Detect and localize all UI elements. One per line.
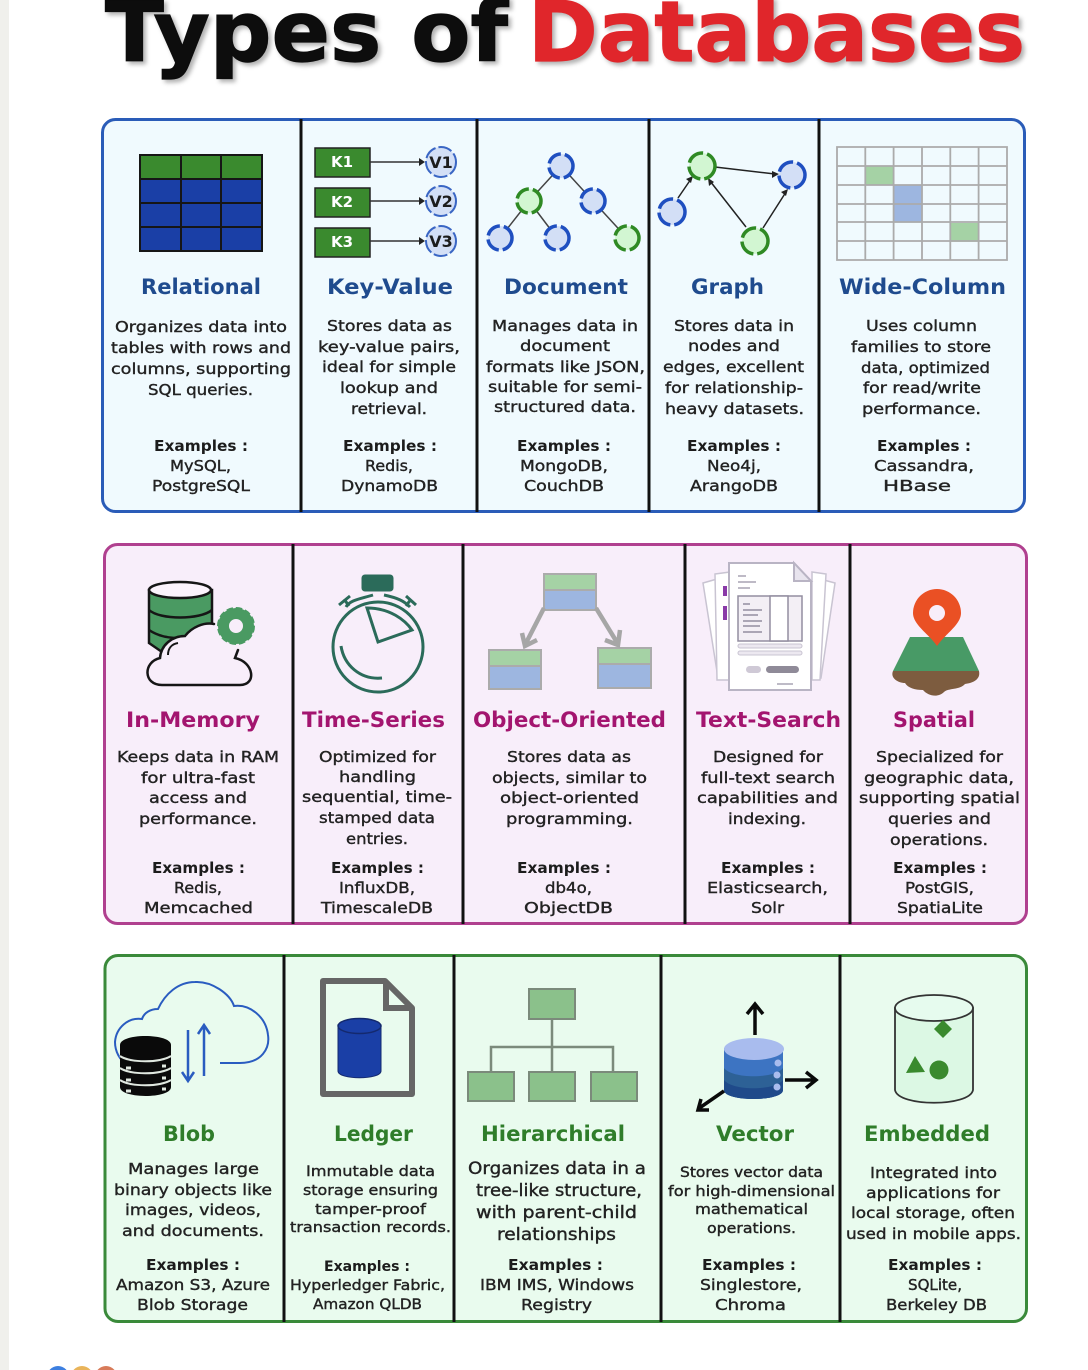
examples: spatial [893,859,987,917]
column: hierarchical [468,989,646,1314]
description: wide-column: data, optimized [861,359,990,377]
description: spatial: geographic data, [864,769,1014,787]
description: spatial: supporting spatial [859,789,1020,807]
icon: graph [659,153,805,254]
column: key-value [315,147,460,495]
description: object-oriented: object-oriented [500,789,639,807]
description: text-search: full-text search [701,769,835,787]
column: graph [659,153,805,495]
description: time-series: entries. [346,830,408,848]
description: document: suitable for semi- [488,378,642,396]
examples: spatial: SpatiaLite [897,899,983,917]
description: in-memory: for ultra-fast [141,769,255,787]
examples: blob: Blob Storage [137,1296,248,1314]
examples: document: CouchDB [524,477,604,495]
heading: object-oriented: Object-Oriented [473,708,666,732]
examples: spatial: Examples : [893,859,987,877]
description: key-value: lookup and [340,379,438,397]
description: graph: nodes and [688,337,780,355]
heading: hierarchical: Hierarchical [481,1122,625,1146]
description: hierarchical: tree-like structure, [476,1181,642,1200]
description: relational: Organizes data into [115,318,287,336]
examples: wide-column [874,437,974,495]
examples: embedded: Berkeley DB [886,1296,987,1314]
description: vector [668,1165,835,1237]
heading: vector: Vector [716,1122,795,1146]
examples: key-value: DynamoDB [341,477,438,495]
description: text-search [697,748,838,828]
heading: embedded: Embedded [864,1122,990,1146]
column: spatial [859,589,1020,917]
examples: wide-column: Cassandra, [874,457,974,475]
description: in-memory [117,748,279,828]
description: spatial: operations. [890,831,988,849]
description: vector: for high-dimensional [668,1184,835,1200]
examples: relational: Examples : [154,437,248,455]
description: graph [663,317,804,418]
examples: object-oriented [517,859,613,917]
description: key-value: retrieval. [351,400,427,418]
examples: blob: Examples : [146,1256,240,1274]
heading: in-memory: In-Memory [126,708,260,732]
description: blob: images, videos, [125,1201,261,1219]
examples: object-oriented: db4o, [545,879,592,897]
column: wide-column [837,147,1007,495]
description: key-value [318,317,460,418]
description: graph: for relationship- [665,379,803,397]
description: embedded: used in mobile apps. [846,1225,1021,1243]
examples: hierarchical: Examples : [508,1256,603,1274]
examples: text-search [707,859,828,917]
heading: key-value: Key-Value [327,275,453,299]
examples: embedded [886,1256,987,1314]
examples: text-search: Examples : [721,859,815,877]
panel: row three [105,955,1026,1322]
column: vector [668,1004,835,1314]
examples: graph [687,437,781,495]
examples: object-oriented: ObjectDB [524,899,613,917]
description: blob: binary objects like [114,1181,272,1199]
icon: blob cloud storage [115,982,268,1096]
icon: vector database [698,1004,816,1110]
description: vector: Stores vector data [680,1165,823,1181]
description: key-value: ideal for simple [322,358,456,376]
description: spatial [859,748,1020,849]
column: blob [114,982,272,1314]
examples: key-value: Examples : [343,437,437,455]
examples: key-value [341,437,438,495]
description: object-oriented: programming. [506,810,633,828]
description: wide-column [851,317,991,418]
description: relational [111,318,291,399]
description: hierarchical [468,1159,646,1244]
heading: graph: Graph [691,275,764,299]
examples: hierarchical: Registry [521,1296,592,1314]
examples: object-oriented: Examples : [517,859,611,877]
description: document: formats like JSON, [486,358,645,376]
icon: key value pairs: K3 [331,233,353,251]
description: key-value: key-value pairs, [318,338,460,356]
panel: row two [104,544,1026,924]
examples: relational [152,437,250,495]
heading: relational: Relational [141,275,261,299]
examples: time-series: TimescaleDB [320,899,433,917]
icon: key value pairs: V1 [429,153,453,172]
description: ledger: storage ensuring [303,1183,438,1199]
title [105,0,1025,81]
examples: blob: Amazon S3, Azure [116,1276,270,1294]
examples: vector: Chroma [715,1296,786,1314]
description: key-value: Stores data as [327,317,452,335]
examples: vector: Singlestore, [700,1276,802,1294]
description: document [486,317,645,416]
description: time-series: stamped data [319,809,435,827]
heading: time-series: Time-Series [302,708,445,732]
description: text-search: capabilities and [697,789,838,807]
icon: document stack [703,563,835,690]
description: graph: heavy datasets. [665,400,804,418]
examples: text-search: Solr [751,899,785,917]
icon: table [140,155,262,251]
column: document [486,154,645,495]
icon: key value pairs: K2 [331,193,353,211]
description: graph: edges, excellent [663,358,804,376]
examples: ledger [290,1259,445,1313]
column: in-memory [117,582,279,917]
column: ledger [290,981,451,1313]
description: blob [114,1160,272,1240]
description: spatial: Specialized for [876,748,1004,766]
icon: embedded cylinder [895,995,973,1103]
icon: key value pairs: V2 [429,192,453,211]
examples: document: MongoDB, [520,457,608,475]
examples: in-memory: Redis, [174,879,222,897]
description: in-memory: access and [149,789,247,807]
column: text-search [696,563,841,917]
description: blob: and documents. [122,1222,264,1240]
description: graph: Stores data in [674,317,794,335]
examples: graph: ArangoDB [690,477,778,495]
heading: ledger: Ledger [334,1122,414,1146]
examples: vector [700,1256,802,1314]
icon: map pin on land [892,589,979,696]
description: spatial: queries and [888,810,991,828]
description: embedded: Integrated into [870,1164,997,1182]
examples: document: Examples : [517,437,611,455]
description: relational: SQL queries. [148,381,253,399]
description: document: structured data. [494,398,636,416]
description: wide-column: for read/write [863,379,981,397]
examples: time-series [320,859,433,917]
description: time-series [302,748,452,848]
description: ledger: tamper-proof [315,1202,427,1218]
heading: wide-column: Wide-Column [839,275,1006,299]
description: document: document [520,337,610,355]
description: wide-column: families to store [851,338,991,356]
examples: key-value: Redis, [365,457,413,475]
description: embedded [846,1164,1021,1243]
heading: spatial: Spatial [893,708,975,732]
icon: wide column grid [837,147,1007,260]
column: object-oriented [473,574,666,917]
column: embedded [846,995,1021,1314]
examples: in-memory: Memcached [144,899,253,917]
description: object-oriented [492,748,647,828]
icon: key value pairs: V3 [429,232,453,251]
description: relational: columns, supporting [111,360,291,378]
description: hierarchical: with parent-child [476,1203,637,1222]
icon: object hierarchy [489,574,651,689]
icon: stopwatch [333,576,423,692]
description: relational: tables with rows and [111,339,291,357]
icon: in-memory database [147,582,252,685]
heading: text-search: Text-Search [696,708,841,732]
examples: wide-column: Examples : [877,437,971,455]
description: ledger: Immutable data [306,1164,435,1180]
description: ledger [290,1164,451,1236]
description: object-oriented: objects, similar to [492,769,647,787]
examples: spatial: PostGIS, [905,879,974,897]
examples: graph: Examples : [687,437,781,455]
examples: hierarchical [480,1256,634,1314]
description: time-series: Optimized for [319,748,437,766]
description: wide-column: Uses column [866,317,977,335]
examples: ledger: Examples : [324,1259,410,1275]
examples: vector: Examples : [702,1256,796,1274]
description: text-search: Designed for [713,748,824,766]
icon: hierarchy tree [468,989,637,1101]
description: hierarchical: relationships [497,1225,616,1244]
examples: text-search: Elasticsearch, [707,879,828,897]
description: object-oriented: Stores data as [507,748,631,766]
examples: in-memory: Examples : [152,859,245,877]
description: text-search: indexing. [728,810,806,828]
examples: relational: MySQL, [170,457,231,475]
examples: wide-column: HBase [883,477,951,495]
examples: blob [116,1256,270,1314]
examples: embedded: SQLite, [908,1276,962,1294]
description: embedded: applications for [866,1184,1001,1202]
examples: in-memory [144,859,253,917]
examples: hierarchical: IBM IMS, Windows [480,1276,634,1294]
examples: document [517,437,611,495]
description: vector: mathematical [695,1202,808,1218]
icon: key value pairs [315,147,456,257]
description: blob: Manages large [128,1160,259,1178]
description: time-series: sequential, time- [302,788,452,806]
examples: embedded: Examples : [888,1256,982,1274]
examples: time-series: InfluxDB, [339,879,415,897]
examples: relational: PostgreSQL [152,477,250,495]
column: time-series [302,576,452,917]
heading: blob: Blob [163,1122,215,1146]
description: hierarchical: Organizes data in a [468,1159,646,1178]
heading: document: Document [504,275,628,299]
examples: ledger: Amazon QLDB [313,1297,422,1313]
icon: document tree [488,154,639,250]
description: embedded: local storage, often [851,1204,1015,1222]
description: wide-column: performance. [862,400,981,418]
panel: row one [102,119,1024,512]
description: document: Manages data in [492,317,638,335]
reaction avatars [47,1366,117,1370]
examples: graph: Neo4j, [707,457,761,475]
icon: key value pairs: K1 [331,153,353,171]
examples: time-series: Examples : [331,859,424,877]
description: vector: operations. [707,1221,796,1237]
description: in-memory: performance. [139,810,257,828]
description: ledger: transaction records. [290,1220,451,1236]
examples: ledger: Hyperledger Fabric, [290,1278,445,1294]
icon: ledger document [323,981,412,1094]
description: in-memory: Keeps data in RAM [117,748,279,766]
description: time-series: handling [339,768,416,786]
column: relational [111,155,291,495]
